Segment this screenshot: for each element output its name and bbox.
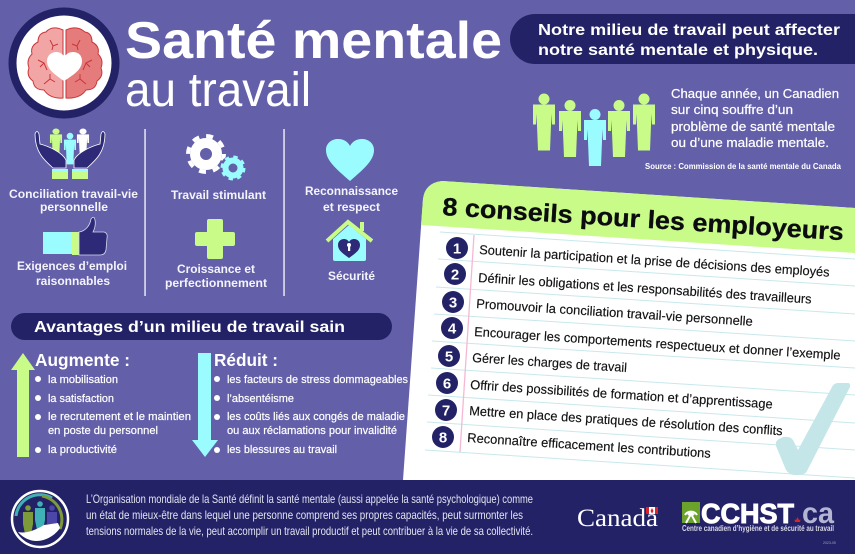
list: augmente: la satisfaction xyxy=(48,393,114,405)
label: reconnaissance: et respect xyxy=(323,202,380,214)
footer band xyxy=(0,480,855,554)
tip 1: Soutenir la participation et la prise de décisions des employés xyxy=(479,242,831,280)
statistic text: Chaque année, un Canadien xyxy=(671,87,839,101)
logo: Canada wordmark: Canada xyxy=(577,505,658,532)
arrow: up xyxy=(11,353,35,457)
label: exigences: raisonnables xyxy=(36,276,110,288)
icon: house with heart xyxy=(327,222,372,261)
icon: hands holding people xyxy=(35,129,105,179)
icon: plus xyxy=(195,219,235,259)
banner: workplace statement: Notre milieu de travail peut affecter xyxy=(538,22,840,39)
label: conciliation xyxy=(9,189,138,214)
tip 6: 6 xyxy=(443,376,451,392)
logo: CCHST: CCHST xyxy=(701,498,794,529)
tip 4: 4 xyxy=(448,320,457,338)
list: réduit: les facteurs de stress dommageables xyxy=(227,374,408,386)
arrow: down xyxy=(192,353,218,457)
panel title: 8 conseils pour les employeurs xyxy=(442,193,845,246)
label: exigences: Exigences d’emploi xyxy=(17,261,127,273)
footer definition text: L’Organisation mondiale de la Santé définit la santé mentale (aussi appelée la santé psychologique) comme xyxy=(86,492,533,506)
logo: CCHST: 2023-05 xyxy=(823,541,836,545)
tip 6: Offrir des possibilités de formation et d’apprentissage xyxy=(470,377,773,412)
label: conciliation: personnelle xyxy=(40,202,108,214)
list: augmente: Augmente : xyxy=(35,350,130,370)
panel: 8 conseils xyxy=(403,181,855,480)
tip 3: 3 xyxy=(449,294,457,312)
list: réduit: ou aux réclamations pour invalidité xyxy=(227,425,397,437)
logo: CCHST xyxy=(682,497,836,545)
tip 2: 2 xyxy=(451,266,459,284)
logo: CCHST: ca xyxy=(802,497,834,530)
icon: thumbs up xyxy=(43,217,107,255)
icon: checkmark xyxy=(776,383,850,475)
list: augmente: le recrutement et le maintien xyxy=(48,411,191,423)
label: conciliation: Conciliation travail-vie xyxy=(9,189,138,201)
heading: avantages: Avantages d’un milieu de travail sain xyxy=(34,319,345,336)
list: augmente: la productivité xyxy=(48,444,117,456)
label: exigences xyxy=(17,261,127,288)
heading: avantages xyxy=(11,313,392,340)
tip 4: Encourager les comportements respectueux et donner l’exemple xyxy=(474,324,841,363)
icon: gears xyxy=(188,136,246,181)
banner: workplace statement xyxy=(510,14,855,64)
tip 1: 1 xyxy=(453,240,461,258)
title: Santé mentale xyxy=(125,12,502,70)
icon: brain with heart logo xyxy=(12,12,116,114)
label: reconnaissance xyxy=(305,186,398,214)
panel header xyxy=(421,181,855,253)
title: au travail xyxy=(125,64,311,117)
tip 8: Reconnaître efficacement les contributions xyxy=(467,430,712,461)
list: réduit: l’absentéisme xyxy=(227,393,294,405)
list: augmente: la mobilisation xyxy=(48,374,118,386)
title xyxy=(125,12,502,117)
icon: five people, one highlighted xyxy=(533,94,655,166)
statistic text: problème de santé mentale xyxy=(671,120,835,134)
label: croissance: perfectionnement xyxy=(165,278,267,290)
tip 5: Gérer les charges de travail xyxy=(472,350,628,375)
tip 7: Mettre en place des pratiques de résolution des conflits xyxy=(469,403,784,438)
icon: heart xyxy=(326,139,374,181)
footer definition text xyxy=(86,492,533,538)
source: Source : Commission de la santé mentale du Canada xyxy=(645,161,841,171)
icon: footer circular logo xyxy=(12,491,68,547)
tip 8: 8 xyxy=(439,430,447,446)
list: réduit: les blessures au travail xyxy=(227,444,337,456)
tip 3: Promouvoir la conciliation travail-vie personnelle xyxy=(476,296,753,329)
list: augmente: en poste du personnel xyxy=(48,425,158,437)
label: travail stimulant: Travail stimulant xyxy=(171,190,266,202)
list: augmente xyxy=(35,350,191,456)
statistic text: sur cinq souffre d’un xyxy=(671,103,793,117)
statistic text: ou d’une maladie mentale. xyxy=(671,136,829,150)
tip 5 xyxy=(438,345,628,375)
statistic text xyxy=(671,87,839,150)
label: sécurité: Sécurité xyxy=(328,271,375,283)
tip 5: 5 xyxy=(445,348,453,366)
list: réduit: les coûts liés aux congés de maladie xyxy=(227,411,405,423)
tip 7: 7 xyxy=(442,402,450,420)
label: croissance xyxy=(165,264,267,290)
banner: workplace statement: notre santé mentale et physique. xyxy=(538,42,818,59)
tip 2: Définir les obligations et les responsabilités des travailleurs xyxy=(478,270,813,307)
footer definition text: un état de mieux-être dans lequel une personne comprend ses propres capacités, peut surmonter les xyxy=(86,508,523,522)
list: réduit: Réduit : xyxy=(214,350,278,370)
footer definition text: tensions normales de la vie, peut accomplir un travail productif et peut contribuer à la vie de sa collectivité. xyxy=(86,524,533,538)
pink margin line xyxy=(460,235,474,452)
label: croissance: Croissance et xyxy=(177,264,255,276)
list: réduit xyxy=(214,350,408,456)
label: reconnaissance: Reconnaissance xyxy=(305,186,398,198)
